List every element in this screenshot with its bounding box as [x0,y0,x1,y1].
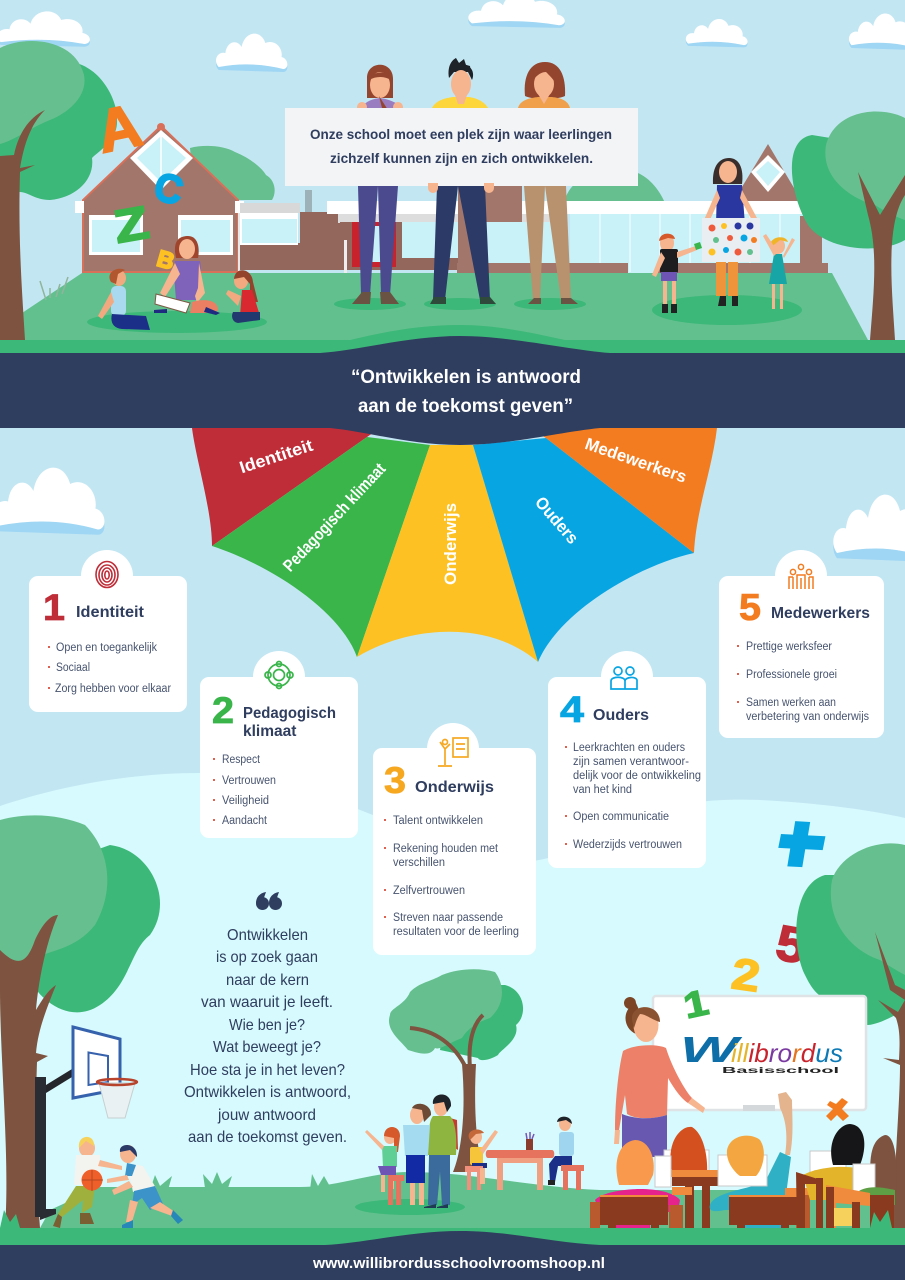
list: Professionele groei [746,669,837,681]
letter C: C [150,164,188,214]
group: three people with poster [285,58,638,310]
bottom lawn [40,1172,905,1228]
icon: circle heart [265,662,293,688]
student 1 body [595,1189,680,1212]
heading: Identiteit [76,604,144,621]
plus sign [777,820,826,868]
list: Veiligheid [222,795,269,807]
quote text: Ontwikkelen [227,927,308,944]
list: Wederzijds vertrouwen [573,839,682,851]
flying numbers [680,949,763,1026]
list: Zorg hebben voor elkaar [55,683,171,695]
digit 1: 1 [680,981,712,1026]
letter Z: Z [110,196,153,253]
sector labels: Onderwijs [441,503,460,585]
quote text: Ontwikkelen is antwoord, [184,1084,351,1101]
slogan: “Ontwikkelen is antwoord [351,367,581,388]
quote text: jouw antwoord [217,1107,316,1124]
letter A: A [91,91,147,166]
school logo: illibrordus [731,1038,843,1068]
classroom students [590,1092,897,1230]
basketball hoop [35,1027,137,1220]
card 5: Medewerkers [719,550,884,738]
poster [285,108,638,186]
digit 2: 2 [729,949,763,1002]
school logo [680,1029,843,1075]
desk 2 [785,1188,810,1195]
icon: parents [611,667,637,689]
list: Vertrouwen [222,775,276,787]
sector labels: Ouders [531,493,582,548]
quote text [184,927,351,1146]
desk row back left [668,1170,718,1177]
grass tufts [40,277,68,300]
legs tan [524,186,571,300]
list: Talent ontwikkelen [393,815,483,827]
ball [82,1170,102,1190]
quote text: van waaruit je leeft. [201,994,333,1011]
scene: school [75,123,828,277]
navy slogan band: aan de toekomst geven” [358,396,573,417]
quote text: aan de toekomst geven. [188,1129,347,1146]
list: Samen werken aan [746,697,836,709]
list [213,754,276,827]
list: Sociaal [56,662,90,674]
list: Prettige werksfeer [746,641,832,653]
school logo: W [680,1029,743,1070]
poster text [310,126,612,166]
eaves [75,201,244,213]
sector labels [237,434,689,585]
chair 1 [600,1195,668,1197]
boy 1 [79,1139,95,1157]
boy right [559,1117,571,1131]
table [486,1150,554,1158]
desk 3 left [796,1172,821,1228]
clouds middle [0,468,905,562]
list: verschillen [393,857,445,869]
background trees [190,146,665,203]
student 2 laptop [664,1150,709,1176]
student 3 laptop [718,1155,767,1186]
lower hills background [0,773,905,1280]
girl left [384,1130,396,1144]
list [48,642,171,695]
sector labels: Identiteit [237,436,316,477]
woman 2 [518,62,570,108]
digit 5 behind tree: 5 [772,914,811,975]
icon: three people [789,564,813,589]
student 4 body [803,1167,856,1200]
sector labels: Pedagogisch klimaat [279,459,390,575]
footer band [0,1231,905,1280]
student 3 body [710,1152,791,1211]
list: verbetering van onderwijs [746,711,869,723]
desk 1 [672,1187,692,1195]
grass tufts [150,1172,332,1190]
top lawn [0,273,868,340]
girl right [470,1130,482,1144]
teacher [175,236,199,258]
quote mark [256,892,282,910]
heading: klimaat [243,723,296,740]
card 1: Identiteit [29,550,187,712]
children at picnic table [355,1094,584,1215]
left gable building [83,126,238,272]
heading: Medewerkers [771,605,870,622]
tree bottom-left [0,815,160,1228]
poster text: Onze school moet een plek zijn waar leerlingen [310,126,612,142]
list: Rekening houden met [393,843,499,855]
desk 3 right [826,1185,870,1228]
icon: teacher at board [438,738,468,766]
right glass wing [566,201,810,214]
feet shadows [334,298,586,310]
tree bottom-right [796,843,905,1228]
green hump top [290,325,640,353]
girl [771,238,785,254]
fan: coloured sectors [192,428,717,662]
right gable [725,144,810,275]
student 2 hair [670,1127,707,1175]
chair 3 [870,1195,894,1228]
quote text: is op zoek gaan [216,949,318,966]
school logo: Basisschool [722,1065,839,1075]
website: www.willibrordusschoolvroomshoop.nl [312,1256,605,1272]
number 2: 2 [212,690,234,731]
student 5 hair [870,1135,897,1195]
middle building [240,243,340,270]
student 4 hair [831,1124,864,1165]
sector yellow [357,445,538,662]
poster text: zichzelf kunnen zijn en zich ontwikkelen. [330,150,593,166]
boy [660,234,674,252]
woman [713,158,742,184]
chair 2 [729,1195,797,1197]
legs purple [358,186,398,295]
letter B: B [154,245,177,275]
boy [112,270,126,286]
girl [234,273,248,289]
group: teacher reading [87,236,267,333]
heading: Pedagogisch [243,705,336,722]
list: Respect [222,754,261,766]
sector labels: Medewerkers [583,434,689,487]
quote text: Wat beweegt je? [213,1039,321,1056]
navy slogan band [0,336,905,445]
clouds top [0,0,905,72]
sector red [192,428,380,546]
number 1: 1 [43,587,65,628]
number 4: 4 [560,689,584,730]
list: resultaten voor de leerling [393,926,519,938]
man with backpack [434,1098,448,1116]
student 5 body [854,1187,895,1205]
student 1 laptop [655,1156,671,1187]
sector orange [530,428,717,553]
student 5 laptop [853,1164,875,1196]
list: zijn samen verantwoor- [573,756,689,768]
heading: Ouders [593,707,649,724]
list: Open en toegankelijk [56,642,157,654]
list: Aandacht [222,815,268,827]
quote text: naar de kern [226,972,309,989]
woman 1 [357,65,403,112]
boy [410,1106,424,1124]
card 2: Pedagogisch klimaat [200,651,358,838]
list: Zelfvertrouwen [393,885,465,897]
windows [89,215,143,255]
list: Leerkrachten en ouders [573,742,685,754]
handprint sheet [702,218,760,262]
card 3: Onderwijs [373,723,536,955]
icon: fingerprint [96,562,118,588]
student 3 hair [727,1136,764,1176]
sector green [212,437,430,657]
list: Streven naar passende [393,912,503,924]
whiteboard [653,996,866,1111]
list: Open communicatie [573,811,669,823]
tree top-right [792,111,905,340]
list [384,815,519,938]
quote text: Hoe sta je in het leven? [190,1062,345,1079]
letters [91,91,188,275]
bottom tufts [0,1210,892,1228]
student 1 hair [616,1140,654,1185]
list: delijk voor de ontwikkeling [573,770,701,782]
players [53,1137,183,1228]
multiply sign [826,1098,849,1121]
tree top-left [0,41,117,340]
man's hands [428,183,494,193]
group: teacher with children and handprints [652,158,802,325]
legs navy [433,186,490,300]
number 5: 5 [739,587,761,628]
heading: Onderwijs [415,779,494,796]
list [737,641,869,723]
list: van het kind [573,784,632,796]
sector blue [473,438,694,662]
student 3 arm [778,1092,792,1155]
man [432,58,488,108]
teacher [614,997,705,1157]
quote text: Wie ben je? [229,1017,305,1034]
student 4 laptop [810,1151,846,1176]
list [565,742,701,851]
boy 2 [120,1145,136,1163]
bottom grass strip [0,1228,905,1246]
number 3: 3 [384,760,406,801]
card 4: Ouders [548,651,706,868]
tree bottom-middle [389,969,523,1172]
